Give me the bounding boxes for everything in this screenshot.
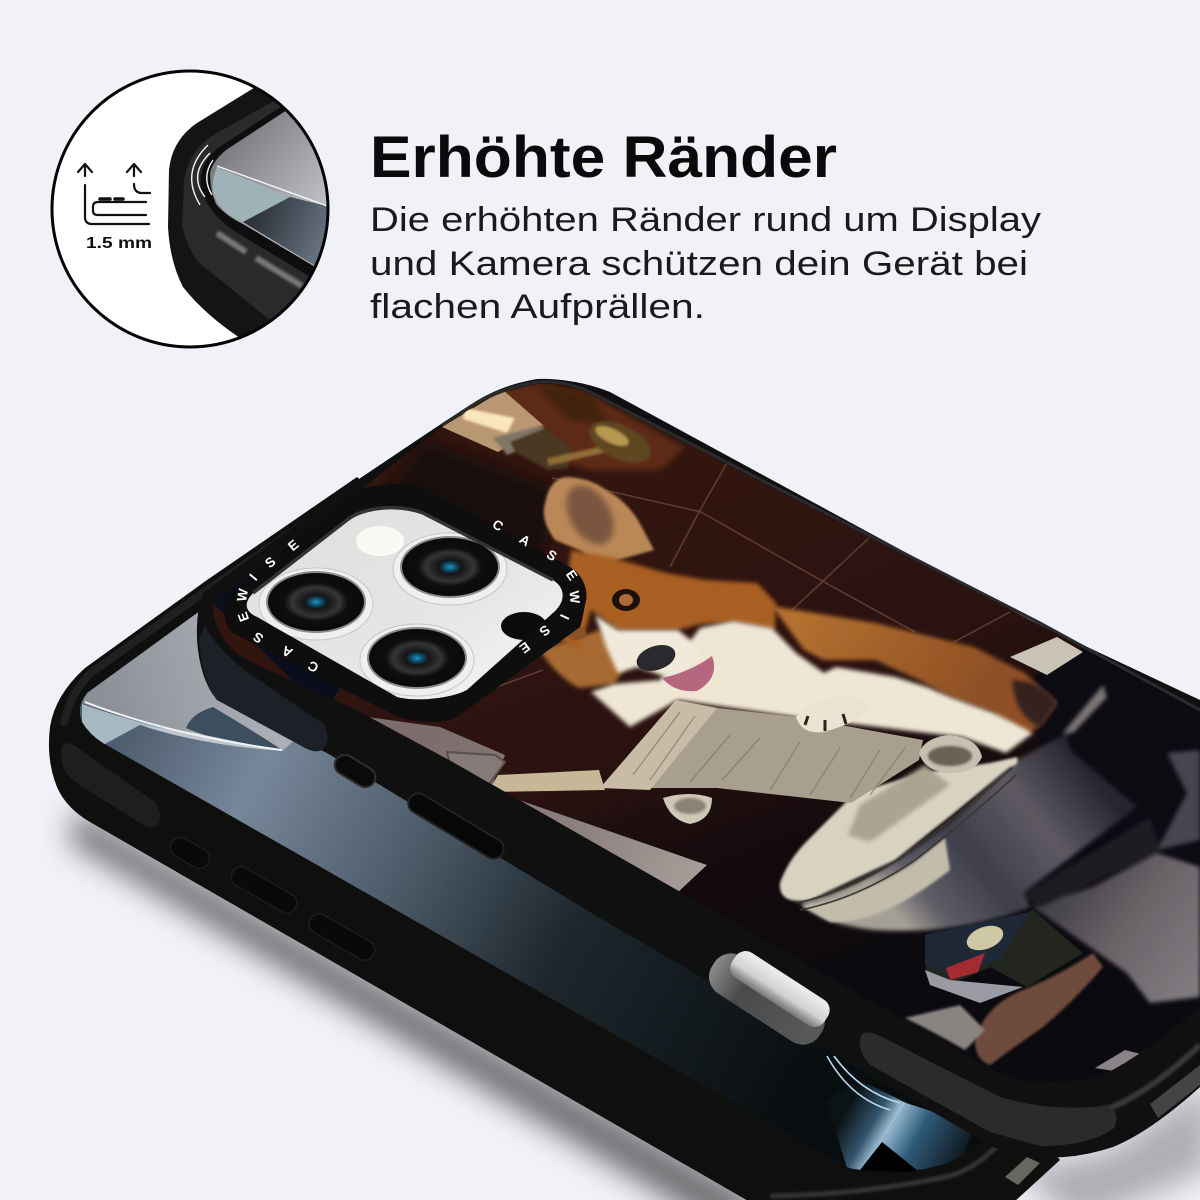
toilet group bbox=[800, 685, 1200, 1003]
inset impact arcs bbox=[192, 145, 213, 205]
toilet base bbox=[1033, 853, 1200, 1003]
newspaper flap bbox=[488, 770, 605, 792]
dark upper left wall bbox=[386, 438, 553, 555]
front bottom bezel highlight bbox=[1010, 1045, 1200, 1113]
front case bbox=[197, 379, 1200, 1157]
dog paw left bbox=[919, 735, 982, 773]
black triangle bbox=[860, 1142, 918, 1172]
pale triangle under glare bbox=[140, 725, 282, 751]
dark corner behind tank bbox=[1032, 648, 1185, 746]
newspaper left page highlight bbox=[600, 700, 717, 790]
corner light ray right bbox=[882, 1103, 975, 1170]
ring brand text: E bbox=[517, 639, 533, 656]
newspaper page bbox=[600, 700, 923, 803]
phone shadows bbox=[70, 810, 1200, 1200]
flash bbox=[356, 526, 404, 556]
newspaper text lines bbox=[633, 712, 905, 798]
dog lower cheek bbox=[540, 630, 625, 688]
ring brand text: C bbox=[305, 658, 321, 675]
ring brand text: W bbox=[234, 587, 251, 603]
back phone bbox=[49, 470, 1060, 1200]
back metallic port bbox=[1005, 1157, 1040, 1185]
dog tongue bbox=[662, 656, 714, 691]
dog leg over seat bbox=[848, 765, 950, 842]
dark inset shape bbox=[186, 707, 282, 750]
toilet tank neck highlight bbox=[1063, 685, 1107, 733]
floor can bbox=[925, 910, 1083, 987]
body text: Die erhöhten Ränder rund um Display bbox=[370, 201, 1041, 239]
ring brand text: S bbox=[544, 547, 560, 564]
ring brand text: E bbox=[563, 567, 580, 583]
gray upper wedge bbox=[82, 612, 293, 751]
ring brand text: W bbox=[566, 590, 583, 604]
charging port button bbox=[726, 946, 834, 1032]
corner light ray left bbox=[836, 1082, 906, 1170]
ring brand text: C bbox=[490, 516, 506, 535]
ring brand text: I bbox=[557, 612, 572, 622]
label: 1.5 mm: 1.5 mm bbox=[86, 235, 152, 252]
lens: left bbox=[259, 568, 373, 640]
body text: und Kamera schützen dein Gerät bei bbox=[370, 245, 1028, 283]
dog body saddle bbox=[772, 606, 1057, 733]
ring brand text: I bbox=[246, 571, 260, 584]
ring brand text: E bbox=[235, 610, 252, 624]
navy sliver by the camera bbox=[213, 542, 350, 700]
ring brand text: S bbox=[536, 622, 553, 639]
inset screen dark bbox=[243, 197, 326, 266]
icon: raised edge height diagram bbox=[78, 164, 150, 224]
paw claws bbox=[805, 714, 846, 731]
toilet tank cap bbox=[1010, 637, 1083, 675]
body text bbox=[370, 201, 1041, 326]
dog eye bbox=[612, 589, 640, 611]
microphone port bbox=[331, 751, 379, 791]
dog nose bbox=[633, 640, 679, 676]
ring brand text: A bbox=[517, 531, 533, 550]
inset phone case body bbox=[168, 88, 274, 337]
back bottom rim highlight bbox=[770, 1130, 1010, 1196]
toilet lid bbox=[780, 757, 1018, 901]
white cloth bbox=[905, 1005, 985, 1050]
camera ring inner bevel bbox=[253, 508, 553, 593]
can flowers bbox=[963, 921, 1007, 955]
lidar hole bbox=[501, 612, 547, 640]
dog ear bbox=[544, 477, 654, 565]
lower paw pads bbox=[674, 798, 706, 814]
toilet bowl bbox=[800, 733, 1137, 931]
ring brand text: S bbox=[262, 554, 279, 571]
inset case lighter band bbox=[182, 102, 309, 320]
dog paw right bbox=[796, 696, 871, 732]
camera ring bbox=[225, 484, 587, 722]
pale blue wedge bbox=[82, 704, 204, 744]
front top thin rim bbox=[442, 382, 1200, 710]
wood panel bbox=[495, 383, 685, 470]
dog chest and belly bbox=[591, 621, 1033, 753]
paw pads bbox=[928, 746, 972, 766]
ring brand text: A bbox=[279, 643, 295, 660]
inset glare line bbox=[217, 166, 330, 207]
front bottom carbon bump bbox=[860, 1032, 1117, 1146]
camera island bbox=[225, 484, 587, 722]
lens: bottom bbox=[360, 624, 474, 696]
back case corner bump bbox=[61, 743, 160, 827]
inset bezel bbox=[200, 107, 314, 276]
charging port recess bbox=[701, 946, 833, 1052]
inset circle: raised edge detail bbox=[52, 60, 340, 347]
dog rump dark patch bbox=[1012, 680, 1057, 728]
towel fold bbox=[447, 752, 505, 787]
can red detail bbox=[946, 953, 985, 980]
brass lamp fixture bbox=[492, 420, 652, 470]
back case bbox=[49, 477, 1060, 1200]
brown plush bbox=[975, 953, 1103, 1065]
toilet right pipe bbox=[1157, 750, 1200, 850]
wall tiles bbox=[480, 463, 1010, 693]
ring brand text bbox=[234, 516, 583, 675]
inset side highlights bbox=[217, 233, 302, 286]
toilet lid lower rim bbox=[802, 838, 950, 922]
front island bump bbox=[199, 625, 328, 751]
can top art bbox=[925, 912, 1030, 975]
wall bbox=[213, 384, 1082, 856]
lens: top right bbox=[393, 533, 507, 605]
glare curve bbox=[85, 702, 282, 750]
camera glass plate bbox=[247, 508, 563, 699]
inset screen pale bbox=[213, 167, 290, 222]
back side button: volume down bbox=[306, 910, 378, 964]
front right corner bump bbox=[1150, 1065, 1200, 1118]
can label bbox=[925, 970, 1023, 1003]
candle glow bbox=[463, 408, 515, 433]
back side button: action bbox=[167, 834, 213, 872]
dog muzzle white bbox=[595, 615, 699, 677]
heading: Erhöhte Ränder bbox=[370, 125, 837, 190]
body text: flachen Aufprällen. bbox=[370, 288, 705, 326]
front screen picture bbox=[200, 370, 1200, 1090]
dog second eye bbox=[566, 626, 586, 640]
candle glass bbox=[442, 390, 543, 452]
ring brand text: S bbox=[250, 629, 266, 646]
corner cloth bbox=[1095, 1050, 1145, 1072]
wood dark fold bbox=[538, 386, 608, 424]
light arcs bbox=[827, 1056, 900, 1110]
toilet lid edge bbox=[796, 768, 1016, 910]
ring brand text: E bbox=[285, 537, 302, 554]
towel on wall bbox=[360, 716, 707, 893]
toilet dark band bbox=[1023, 817, 1160, 908]
inset screen gray bbox=[210, 111, 326, 266]
back case rim highlight bbox=[64, 490, 352, 722]
dog paw lower bbox=[663, 794, 712, 824]
dog head and neck bbox=[560, 550, 776, 650]
back side button: volume up bbox=[228, 863, 300, 917]
back screen bbox=[80, 612, 972, 1172]
front side button bbox=[405, 790, 507, 862]
front phone bbox=[197, 370, 1200, 1158]
